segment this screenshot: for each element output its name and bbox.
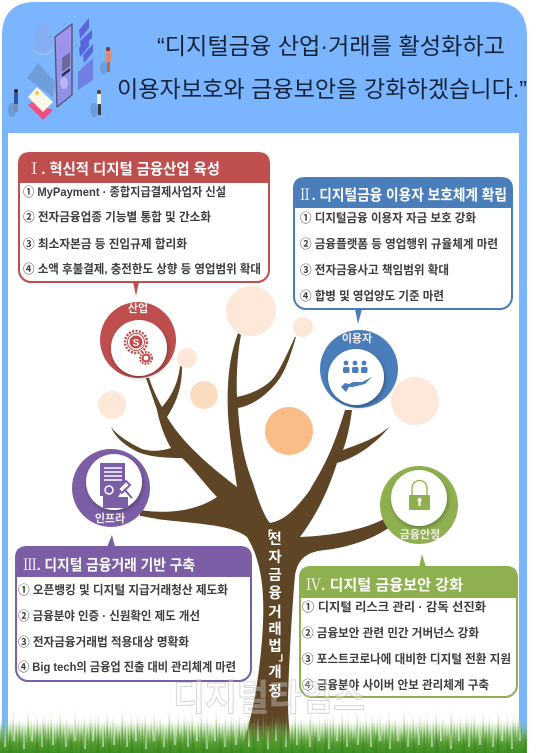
pointer	[419, 554, 426, 567]
pointer	[355, 309, 362, 324]
list items	[300, 210, 498, 303]
list items	[23, 184, 261, 276]
title line 1: “디지털금융 산업·거래를 활성화하고	[157, 33, 505, 59]
icon: padlock	[409, 481, 430, 510]
list items: ③ 전자금융거래법 적용대상 명확화	[18, 634, 189, 649]
trunk label: 전자금융거래법 개정: 「	[262, 529, 272, 542]
list items	[302, 599, 511, 692]
trunk label: 전자금융거래법 개정: 전	[268, 531, 282, 548]
illustration: mobile finance	[8, 18, 111, 120]
panel box	[16, 547, 251, 681]
circle: users	[320, 330, 398, 408]
tree	[98, 286, 439, 753]
label: 이용자	[342, 332, 372, 345]
panel header	[299, 566, 518, 598]
title line 2: 이용자보호와 금융보안을 강화하겠습니다.”	[117, 76, 527, 102]
main white panel	[8, 133, 519, 753]
illustration: lock hologram	[33, 23, 53, 55]
panel header	[15, 546, 252, 577]
panel header	[293, 177, 513, 208]
label: 산업	[128, 301, 148, 315]
list items: ③ 최소자본금 등 진입규제 합리화	[23, 236, 187, 251]
panel box	[300, 567, 517, 697]
panel IV: security	[299, 554, 518, 697]
list items: ③ 전자금융사고 책임범위 확대	[300, 262, 449, 277]
trunk label: 전자금융거래법 개정: 거	[268, 604, 282, 621]
trunk label: 전자금융거래법 개정: 」	[278, 651, 290, 663]
heading: Ⅰ. 혁신적 디지털 금융산업 육성	[27, 158, 220, 179]
grass	[0, 703, 527, 753]
trunk label: 전자금융거래법 개정: 법	[268, 638, 282, 655]
heading: Ⅱ. 디지털금융 이용자 보호체계 확립	[298, 184, 507, 205]
illustration: bank cards	[28, 87, 53, 120]
illustration: floating blue cards	[78, 18, 93, 90]
illustration: people	[8, 47, 111, 117]
list items: ④ 합병 및 영업양도 기준 마련	[300, 288, 444, 303]
tree leaves: peach circles	[98, 286, 439, 455]
panel I: industry	[18, 152, 270, 296]
circle: industry	[100, 301, 176, 378]
list items	[18, 582, 236, 674]
list items: ④ Big tech의 금융업 진출 대비 관리체계 마련	[18, 660, 236, 674]
watermark: 디지털타임스	[173, 677, 365, 718]
illustration: phone	[55, 24, 72, 107]
trunk label: 전자금융거래법 개정: 자	[268, 549, 282, 566]
illustration: floor shadow	[27, 63, 55, 97]
list items: ④ 금융분야 사이버 안보 관리체계 구축	[302, 678, 489, 692]
list items: ② 금융보안 관련 민간 거버넌스 강화	[302, 625, 479, 640]
trunk label: 전자금융거래법 개정: 정	[268, 683, 282, 700]
list items: ④ 소액 후불결제, 충전한도 상향 등 영업범위 확대	[23, 261, 261, 276]
trunk label: 전자금융거래법 개정: 개	[268, 664, 282, 681]
panel header	[18, 152, 270, 183]
list items: ① MyPayment · 종합지급결제사업자 신설	[23, 184, 226, 199]
trunk label: 전자금융거래법 개정: 금	[268, 568, 282, 584]
heading: Ⅲ. 디지털 금융거래 기반 구축	[23, 554, 195, 575]
icon: gears with dollar: S	[133, 338, 140, 349]
list items: ② 금융플랫폼 등 영업행위 규율체계 마련	[300, 236, 498, 251]
icon: legal document	[100, 463, 132, 508]
list items: ② 금융분야 인증 · 신원확인 제도 개선	[18, 608, 200, 623]
trunk label: 전자금융거래법 개정: 래	[268, 621, 282, 638]
label: 금융안정	[400, 528, 440, 541]
list items: ① 디지털 리스크 관리 · 감독 선진화	[302, 599, 486, 614]
panel II: users	[293, 177, 513, 324]
list items: ② 전자금융업종 기능별 통합 및 간소화	[23, 209, 211, 224]
trunk label: 전자금융거래법 개정: 융	[268, 585, 282, 602]
pointer	[107, 535, 115, 547]
circle: infrastructure	[72, 449, 150, 527]
list items: ③ 포스트코로나에 대비한 디지털 전환 지원	[302, 651, 511, 666]
list items: ① 디지털금융 이용자 자금 보호 강화	[300, 210, 476, 225]
panel box	[294, 178, 512, 309]
icon: people over hand	[341, 361, 372, 392]
trunk label: 전자금융거래법 개정	[262, 529, 290, 700]
tree trunk and branches	[111, 333, 390, 753]
list items: ① 오픈뱅킹 및 디지털 지급거래청산 제도화	[18, 582, 228, 597]
circle: financial stability	[380, 466, 458, 544]
panel box	[19, 153, 269, 282]
title	[117, 33, 527, 102]
pointer	[133, 282, 139, 296]
panel III: infrastructure	[15, 535, 252, 681]
heading: Ⅳ. 디지털 금융보안 강화	[306, 574, 463, 595]
label: 인프라	[95, 512, 125, 525]
